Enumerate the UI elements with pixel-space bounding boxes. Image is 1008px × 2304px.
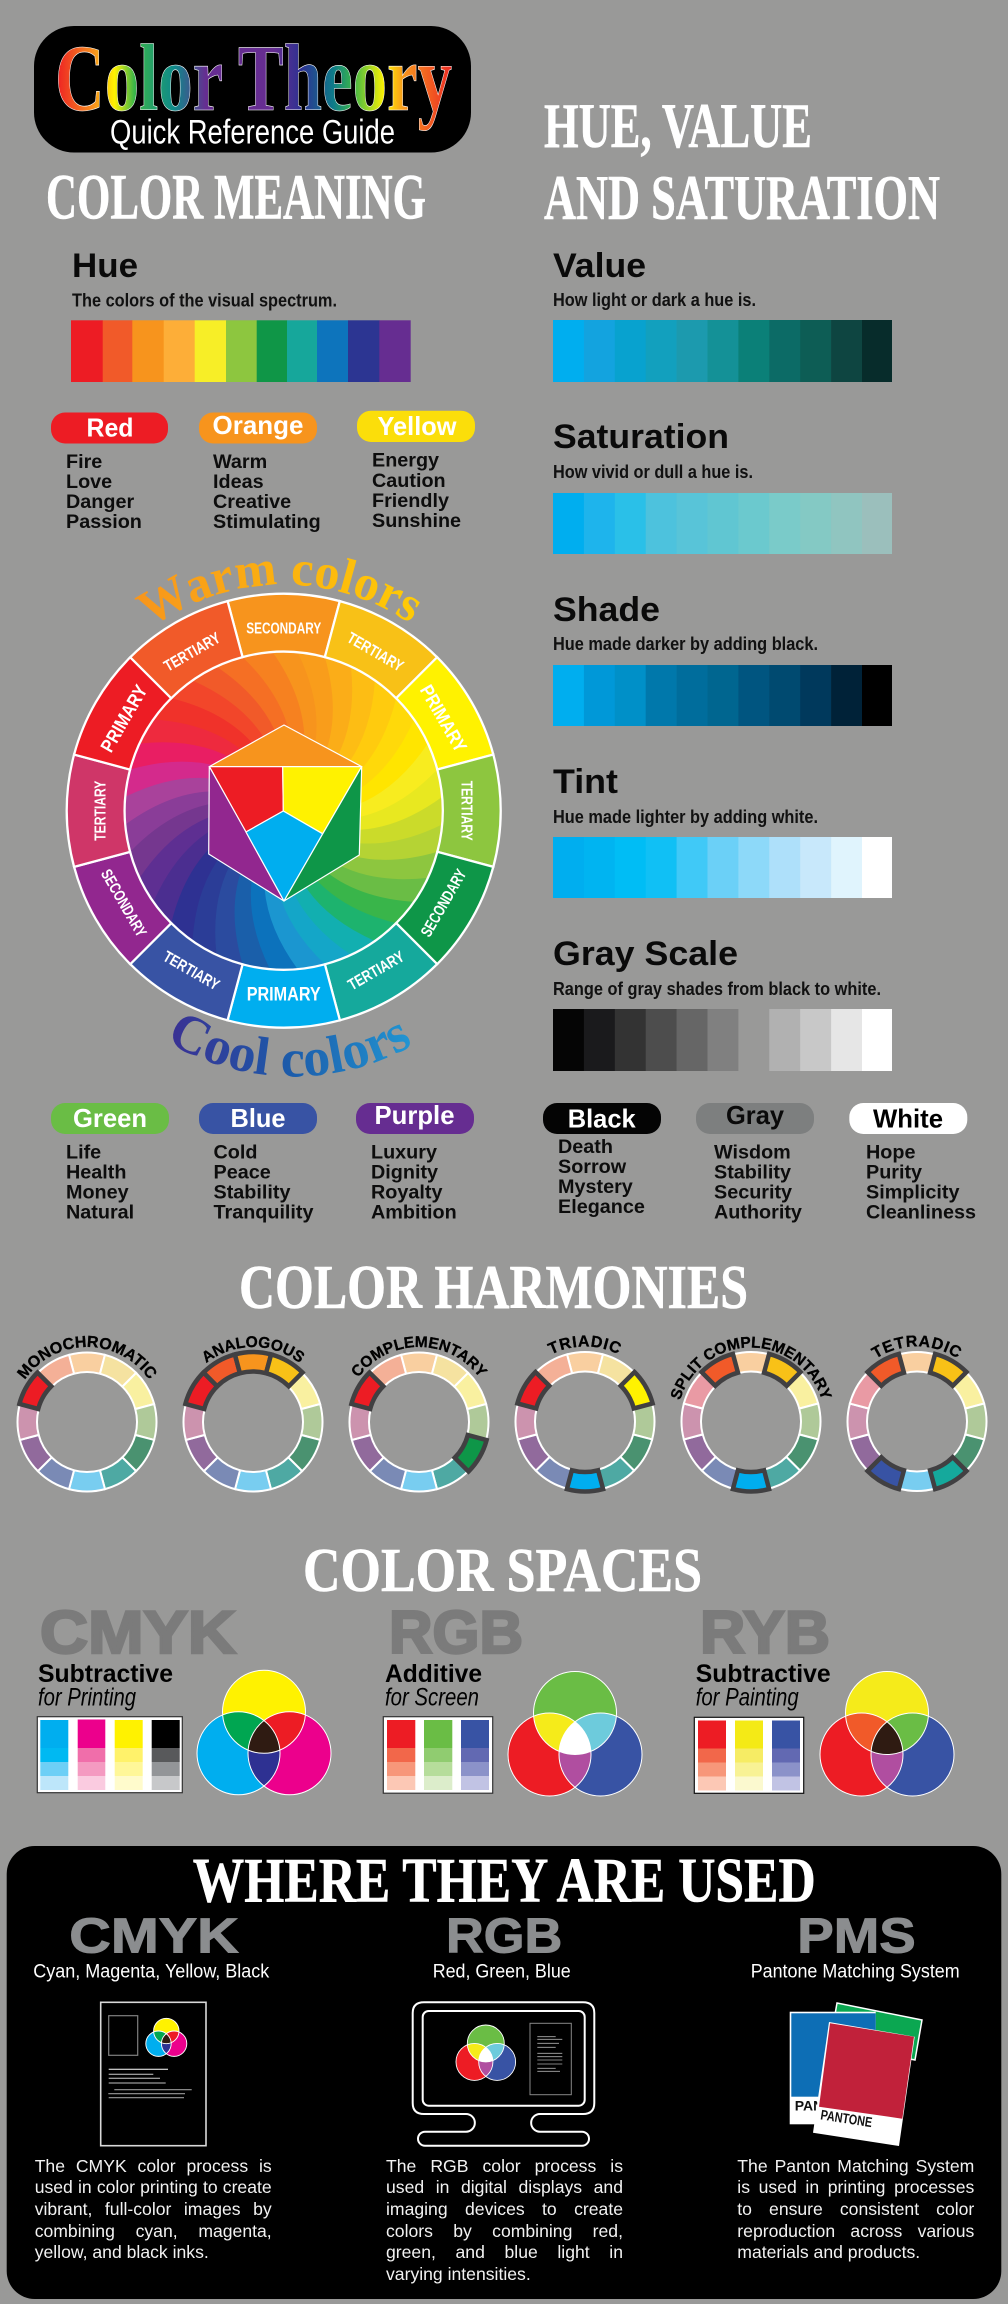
panel: tint: Tint: [553, 763, 618, 801]
color meaning: gray: Gray: [726, 1100, 785, 1130]
color meaning: red: Red: [86, 412, 134, 442]
wheel ring labels: TERTIARY: [344, 630, 406, 676]
color meaning: gray: Stability: [714, 1162, 791, 1184]
color meaning: blue: Cold: [214, 1142, 257, 1164]
text block: RGB usage: The RGB color process is: [386, 2156, 623, 2176]
color meaning: white: Simplicity: [866, 1182, 959, 1204]
panel: hue: Hue: [72, 247, 138, 285]
panel: RYB color space: [694, 1599, 954, 1796]
color meaning: blue: [199, 1103, 317, 1224]
wheel ring labels: SECONDARY: [97, 867, 149, 940]
panel: RGB color space: RGB: [389, 1599, 523, 1666]
panel: CMYK color space: [37, 1599, 331, 1795]
color meaning: white: [849, 1103, 976, 1224]
color meaning: yellow: Caution: [372, 470, 446, 492]
wheel ring labels: TERTIARY: [161, 630, 224, 676]
color meaning: blue: Peace: [214, 1162, 271, 1184]
color meaning: black: Death: [558, 1136, 613, 1158]
text block: PMS usage: materials and products.: [737, 2242, 920, 2262]
panel: gray scale: Range of gray shades from black to white.: [553, 979, 881, 999]
color meaning: purple: Ambition: [371, 1202, 457, 1224]
harmony wheel: analogous: [182, 1336, 324, 1492]
text block: PMS usage: reproduction across various: [737, 2221, 974, 2241]
CMYK venn diagram: [197, 1670, 331, 1795]
CMYK swatches: [37, 1717, 182, 1793]
text block: CMYK usage: vibrant, full-color images by: [35, 2199, 272, 2219]
color meaning: yellow: Yellow: [378, 411, 457, 441]
heading: color spaces: COLOR SPACES: [303, 1537, 702, 1605]
heading: warm colors: Warm colors: [134, 558, 420, 620]
wheel ring labels: TERTIARY: [458, 781, 475, 841]
color meaning: green: [51, 1103, 169, 1224]
color meaning: yellow: Friendly: [372, 490, 449, 512]
wheel ring labels: [93, 621, 475, 1006]
text block: RGB usage: green, and blue light in: [386, 2242, 623, 2262]
panel: gray scale: [553, 935, 892, 1071]
panel: RGB color space: for Screen: [385, 1684, 479, 1712]
color meaning: red: Fire: [66, 451, 102, 473]
harmony wheel: complementary: [348, 1336, 490, 1492]
title banner: [34, 25, 471, 152]
color meaning: purple: Royalty: [371, 1182, 442, 1204]
RYB venn diagram: [820, 1672, 954, 1796]
usage column heading: PMS: Pantone Matching System: [751, 1962, 960, 1983]
usage column heading: CMYK: [33, 1909, 270, 1983]
panel: RYB color space: RYB: [700, 1599, 830, 1666]
icon: monitor: [413, 2002, 594, 2146]
harmony wheel: split complementary: SPLIT COMPLEMENTARY: [670, 1336, 832, 1400]
panel: value: [553, 247, 892, 382]
color meaning: green: Health: [66, 1162, 126, 1184]
color meaning: orange: Stimulating: [213, 511, 321, 533]
color meaning: red: Danger: [66, 491, 134, 513]
color meaning: white: White: [873, 1104, 943, 1134]
color meaning: gray: Wisdom: [714, 1142, 791, 1164]
heading: color meaning: COLOR MEANING: [46, 162, 426, 234]
color meaning: orange: Warm: [213, 451, 267, 473]
wheel swirl: [121, 648, 446, 973]
color meaning: white: Cleanliness: [866, 1202, 976, 1224]
text block: PMS usage: to ensure consistent color: [737, 2199, 974, 2219]
usage column heading: CMYK: CMYK: [69, 1909, 239, 1963]
icon: pantone cards: [790, 2003, 922, 2146]
panel: CMYK color space: CMYK: [40, 1599, 236, 1666]
panel: RGB color space: Additive: [385, 1660, 482, 1688]
text block: RGB usage: used in digital displays and: [386, 2177, 623, 2197]
color meaning: green: Green: [73, 1103, 147, 1133]
heading: cool colors: Cool colors: [173, 1016, 410, 1077]
color meaning: gray: Security: [714, 1182, 792, 1204]
wheel ring labels: PRIMARY: [415, 682, 470, 756]
wheel ring labels: PRIMARY: [247, 985, 321, 1006]
color meaning: gray: Authority: [714, 1202, 802, 1224]
panel: shade: Shade: [553, 591, 660, 629]
panel: value: Value: [553, 247, 646, 285]
panel: saturation: How vivid or dull a hue is.: [553, 462, 753, 482]
color meaning: green: Natural: [66, 1202, 134, 1224]
wheel center hexagon: [209, 725, 362, 901]
value strip: [553, 320, 892, 382]
wheel ring labels: TERTIARY: [93, 780, 110, 841]
usage column heading: CMYK: Cyan, Magenta, Yellow, Black: [33, 1962, 270, 1983]
color meaning: orange: Orange: [212, 410, 304, 440]
usage column heading: RGB: RGB: [446, 1909, 562, 1963]
panel: RYB color space: for Painting: [696, 1684, 799, 1712]
text block: RGB usage: colors by combining red,: [386, 2221, 623, 2241]
panel: where they are used background: [7, 1846, 1001, 2299]
title banner: Quick Reference Guide: [110, 114, 395, 152]
color meaning: yellow: [357, 411, 475, 532]
heading: hue, value and saturation: HUE, VALUE: [544, 90, 812, 161]
panel: CMYK color space: for Printing: [38, 1684, 136, 1712]
panel: saturation: Saturation: [553, 418, 729, 456]
color meaning: blue: Blue: [230, 1103, 286, 1133]
color meaning: white: Purity: [866, 1162, 922, 1184]
gray scale strip: [553, 1009, 892, 1071]
usage column heading: RGB: Red, Green, Blue: [433, 1962, 571, 1983]
RYB swatches: [694, 1717, 804, 1793]
text block: CMYK usage: The CMYK color process is: [35, 2156, 272, 2176]
shade strip: [553, 665, 892, 726]
panel: RGB color space: [383, 1599, 642, 1796]
harmony wheel: tetradic: TETRADIC: [870, 1335, 962, 1358]
saturation strip: [553, 493, 892, 554]
color meaning: black: [543, 1103, 661, 1218]
harmony wheel: triadic: [514, 1335, 656, 1494]
color meaning: purple: [356, 1100, 474, 1224]
wheel ring labels: TERTIARY: [160, 948, 222, 994]
harmony wheel: analogous: ANALOGOUS: [204, 1336, 304, 1364]
text block: CMYK usage: yellow, and black inks.: [35, 2242, 209, 2262]
panel: value: How light or dark a hue is.: [553, 290, 756, 310]
color meaning: red: [51, 412, 168, 533]
RGB swatches: [383, 1717, 493, 1793]
RGB venn diagram: [508, 1672, 642, 1796]
icon: pantone cards: PANTONE: [820, 2106, 873, 2130]
text block: RGB usage: imaging devices to create: [386, 2199, 623, 2219]
heading: where they are used: WHERE THEY ARE USED: [193, 1845, 816, 1916]
harmony wheel: complementary: COMPLEMENTARY: [352, 1336, 488, 1376]
color meaning: purple: Dignity: [371, 1162, 438, 1184]
color meaning: purple: Luxury: [371, 1142, 437, 1164]
tint strip: [553, 837, 892, 898]
color meaning: black: Black: [568, 1104, 636, 1134]
panel: CMYK color space: Subtractive: [38, 1660, 173, 1688]
icon: printed page: [101, 2002, 206, 2146]
harmony wheel: monochromatic: MONOCHROMATIC: [16, 1336, 156, 1380]
color meaning: yellow: Sunshine: [372, 510, 461, 532]
hue strip: [71, 320, 411, 382]
color meaning: green: Money: [66, 1182, 129, 1204]
panel: tint: [553, 763, 892, 898]
wheel ring labels: PRIMARY: [97, 681, 153, 756]
color meaning: green: Life: [66, 1142, 101, 1164]
text block: PMS usage: The Panton Matching System: [737, 2156, 974, 2176]
text block: PMS usage: [737, 2156, 974, 2262]
wheel ring labels: SECONDARY: [246, 621, 321, 638]
title banner: Color Theory: [55, 25, 452, 131]
usage column heading: RGB: [433, 1909, 571, 1983]
color meaning: blue: Stability: [214, 1182, 290, 1204]
wheel outer ring: [67, 594, 501, 1028]
heading: hue, value and saturation: [544, 90, 940, 233]
panel: RYB color space: Subtractive: [696, 1660, 831, 1688]
usage column heading: PMS: PMS: [797, 1909, 916, 1963]
panel: tint: Hue made lighter by adding white.: [553, 807, 818, 827]
color meaning: red: Love: [66, 471, 112, 493]
color meaning: yellow: Energy: [372, 450, 439, 472]
wheel ring labels: TERTIARY: [345, 948, 408, 994]
icon: pantone cards: PANTONE: [795, 2098, 862, 2114]
text block: RGB usage: varying intensities.: [386, 2264, 531, 2284]
panel: hue: [71, 247, 411, 382]
harmony wheel: split complementary: [670, 1336, 832, 1494]
usage column heading: PMS: [751, 1909, 960, 1983]
color meaning: red: Passion: [66, 511, 142, 533]
panel: hue: The colors of the visual spectrum.: [72, 290, 337, 310]
heading: color harmonies: COLOR HARMONIES: [239, 1254, 748, 1322]
color meaning: black: Sorrow: [558, 1156, 627, 1178]
text block: PMS usage: is used in printing processes: [737, 2177, 974, 2197]
text block: CMYK usage: [34, 2156, 272, 2262]
text block: CMYK usage: combining cyan, magenta,: [35, 2221, 272, 2241]
color meaning: black: Mystery: [558, 1176, 633, 1198]
color meaning: orange: [199, 410, 321, 533]
color meaning: purple: Purple: [374, 1100, 454, 1130]
color wheel: [67, 594, 501, 1028]
color meaning: gray: [696, 1100, 814, 1224]
panel: shade: Hue made darker by adding black.: [553, 634, 818, 654]
color meaning: black: Elegance: [558, 1196, 645, 1218]
panel: shade: [553, 591, 892, 726]
harmony wheel: monochromatic: [16, 1336, 158, 1492]
harmony wheel: tetradic: [846, 1335, 988, 1492]
color meaning: white: Hope: [866, 1142, 915, 1164]
harmony wheel: triadic: TRIADIC: [546, 1335, 621, 1354]
color meaning: blue: Tranquility: [214, 1202, 314, 1224]
color meaning: orange: Ideas: [213, 471, 264, 493]
panel: gray scale: Gray Scale: [553, 935, 738, 973]
panel: saturation: [553, 418, 892, 554]
wheel ring labels: SECONDARY: [418, 867, 471, 940]
text block: CMYK usage: used in color printing to create: [35, 2177, 272, 2197]
color meaning: orange: Creative: [213, 491, 291, 513]
text block: RGB usage: [386, 2156, 623, 2284]
